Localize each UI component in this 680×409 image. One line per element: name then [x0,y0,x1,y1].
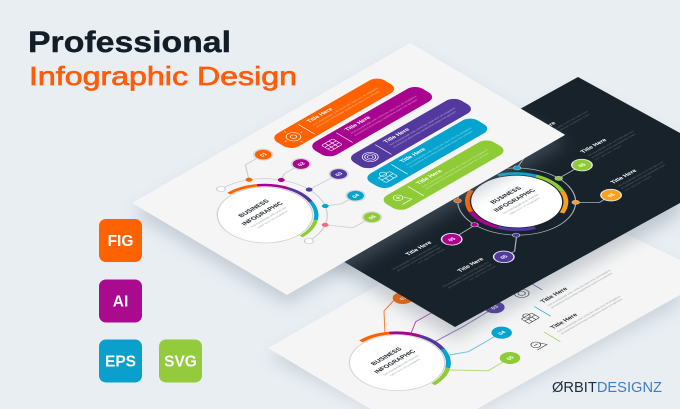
subtitle: Infographic Design [29,61,297,91]
number badges: 01 [259,152,269,158]
slide 3 badges: 04 [497,330,508,336]
slide 3 list items: Sed ut perspiciatis unde omnis iste natus error sit voluptatem [546,269,612,307]
slide 3 local content [304,219,648,409]
pill 3 purple: accusantium doloremque laudantium totam rem aperiam [391,110,458,148]
connector ring [209,142,392,249]
number badges: 02 [297,161,307,168]
pill 2 magenta: Sed ut perspiciatis unde omnis iste natus error sit voluptatem [349,95,418,134]
slide 3 list items: Title Here [539,286,570,304]
slide 3 center circle: natus error sit voluptatem [388,358,422,377]
number badges [250,134,405,226]
dark slide center circle: natus error sit voluptatem [508,197,542,215]
dark slide center circle: Sed ut perspiciatis unde omnis iste [501,193,540,215]
pill 5 green: Title Here [415,169,445,186]
icon: FIG badge: FIG [108,233,133,250]
dark slide text blocks: Sed ut perspiciatis unde omnis iste natus error [441,261,490,288]
pill 1 orange: accusantium doloremque laudantium totam rem aperiam [315,90,381,128]
dark slide text blocks: accusantium doloremque laudantium totam [446,262,494,289]
slide 3 center circle: INFOGRAPHIC [373,349,418,375]
dark slide badges [435,157,639,271]
dark slide badges: 05 [578,163,588,169]
number badges: 04 [351,193,362,199]
slide 3 badges: 01 [399,295,409,302]
pill 5 green: Sed ut perspiciatis unde omnis iste natus error sit voluptatem [421,148,490,188]
icon: EPS badge: EPS [105,354,136,370]
pill 2 magenta: Title Here [344,115,373,132]
dark slide center circle [450,163,584,240]
pill 4 cyan: accusantium doloremque laudantium totam rem aperiam [408,130,474,168]
icon: SVG badge [159,340,202,382]
slide 3 center circle [327,320,470,404]
dark slide text blocks: rem aperiam eaque [593,144,623,161]
pill 1 orange: Sed ut perspiciatis unde omnis iste natus error sit voluptatem [311,86,380,126]
panel: bottom light slide [268,192,680,409]
pill 2 magenta [308,84,437,159]
dark slide text blocks: Title Here [457,257,486,273]
dark slide text blocks [339,103,680,298]
title: Professional [28,26,231,59]
center circle: INFOGRAPHIC [240,201,286,227]
slide 3 connectors [384,298,510,371]
dark slide text blocks: Title Here [580,138,609,154]
slide 3 badges: 03 [490,305,500,311]
dark slide text blocks: Sed ut perspiciatis unde omnis iste natus error [535,110,589,140]
slide 3 badges [388,267,560,368]
dark slide text blocks: rem aperiam eaque [467,265,497,281]
dark slide text blocks: Title Here [610,169,639,185]
number badges: 05 [368,215,378,221]
pill 3 purple: Sed ut perspiciatis unde omnis iste natus error sit voluptatem [388,106,457,146]
center circle: BUSINESS [237,198,272,219]
pill 4 cyan: Title Here [399,147,428,164]
dark slide text blocks: Sed ut perspiciatis unde omnis iste natus error [586,130,635,157]
dark slide badges: 05 [499,254,510,260]
dark slide center circle: INFOGRAPHIC [492,188,538,213]
dark slide dots [440,158,593,245]
dark slide text blocks: Sed ut perspiciatis unde omnis iste natus error [616,160,665,188]
number badges: 03 [334,171,345,178]
dark slide text blocks: accusantium doloremque laudantium totam [395,245,443,272]
pill 5 green [379,138,508,212]
icon: AI badge: AI [113,294,128,310]
slide 3 list items: accusantium doloremque laudantium totam rem aperiam [559,298,624,335]
slide 3 list items: Title Here [549,312,580,330]
dark slide badges: 05 [607,193,617,199]
center circle [195,173,337,256]
pill 1 orange [270,76,399,151]
icon: SVG badge: SVG [164,354,197,370]
dark slide text blocks: accusantium doloremque laudantium totam [619,163,667,190]
logo: OrbitDesignz: ØRBITDESIGNZ [552,379,662,396]
slide 3 center circle: BUSINESS [370,346,405,367]
dark slide connectors [410,142,625,263]
center circle: Sed ut perspiciatis unde omnis iste [249,206,288,228]
icon: FIG badge [99,219,142,262]
dark slide surface [295,77,680,327]
slide 3 center circle: Sed ut perspiciatis unde omnis iste [382,354,420,376]
slide 3 badges: 05 [506,355,516,362]
slide 3 list items: accusantium doloremque laudantium totam rem aperiam [549,272,614,309]
center circle: natus error sit voluptatem [256,210,289,229]
dark slide center circle: BUSINESS [489,186,524,205]
pill 4 cyan: Sed ut perspiciatis unde omnis iste natus error sit voluptatem [404,126,473,166]
dark slide text blocks: accusantium doloremque laudantium totam [538,113,592,142]
white slide content [132,43,565,295]
panel: dark slide [295,77,680,339]
dark slide text blocks: Sed ut perspiciatis unde omnis iste natus error [390,244,439,271]
pill 1 orange: Title Here [306,107,335,124]
dark slide text blocks: Title Here [529,121,559,137]
pill 5 green: accusantium doloremque laudantium totam rem aperiam [424,152,490,190]
slide 3 list items: Sed ut perspiciatis unde omnis iste natus error sit voluptatem [556,295,622,333]
ring dots [244,164,352,228]
pill 4 cyan [363,116,492,191]
title [28,26,297,91]
dark slide text blocks: Title Here [405,240,434,257]
slide 3 list items [472,250,648,352]
icon: AI badge [99,280,142,322]
dark slide badges: 05 [447,237,458,243]
dark slide text blocks: rem aperiam eaque [416,248,446,264]
icon: EPS badge [99,340,142,382]
pill 3 purple: Title Here [383,127,412,144]
dark slide outer ring [433,154,600,249]
slide 3 surface [268,192,680,409]
panel: top white slide [132,43,567,305]
dark slide text blocks: rem aperiam eaque [623,175,653,192]
dark slide text blocks: accusantium doloremque laudantium totam [590,132,637,159]
pill 2 magenta: accusantium doloremque laudantium totam rem aperiam [353,98,419,136]
dark slide content [339,103,680,299]
pill 3 purple [346,96,475,171]
